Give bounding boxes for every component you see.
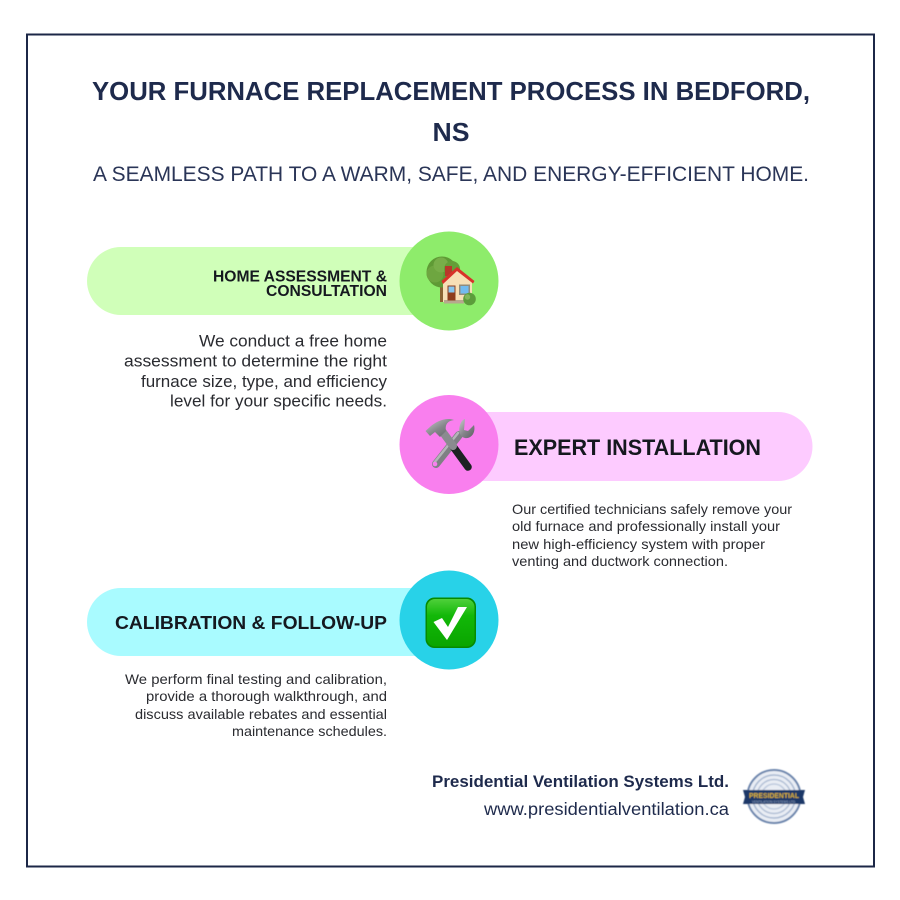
step 2 description: new high-efficiency system with proper (512, 537, 765, 552)
icon: house with tree (426, 256, 476, 305)
step 2 description: old furnace and professionally install your (512, 519, 780, 534)
step 3 heading: CALIBRATION & FOLLOW-UP (115, 613, 387, 633)
company logo badge: VENTILATION SYSTEMS LTD. (752, 800, 796, 804)
step 2 heading: EXPERT INSTALLATION (514, 435, 761, 460)
title: NS (432, 117, 470, 147)
icon: hammer and wrench (426, 419, 474, 467)
footer company name: Presidential Ventilation Systems Ltd. (432, 772, 729, 791)
step 3 description: provide a thorough walkthrough, and (146, 689, 387, 704)
step 2 description: Our certified technicians safely remove your (512, 502, 792, 517)
step 3 description: We perform final testing and calibration, (125, 672, 387, 687)
company logo badge (743, 770, 805, 823)
icon: green check mark (426, 598, 476, 648)
step 3: calibration and follow-up (87, 570, 498, 739)
step 3 banner (87, 588, 430, 656)
step 2 icon circle (400, 395, 498, 494)
subtitle: A SEAMLESS PATH TO A WARM, SAFE, AND ENERGY-EFFICIENT HOME. (93, 163, 809, 186)
step 2 description (512, 502, 792, 569)
step 1 heading (213, 268, 387, 300)
step 1 heading: HOME ASSESSMENT & (213, 268, 387, 286)
step 1 icon circle (400, 232, 498, 330)
step 1: home assessment (87, 232, 499, 410)
step 2 description: venting and ductwork connection. (512, 554, 728, 569)
step 1 banner (87, 247, 430, 315)
step 2: expert installation (400, 395, 813, 569)
step 3 description: discuss available rebates and essential (135, 707, 387, 722)
title: YOUR FURNACE REPLACEMENT PROCESS IN BEDFORD, (92, 76, 810, 106)
step 2 banner (470, 412, 813, 481)
step 1 description: level for your specific needs. (170, 392, 387, 410)
step 1 description (124, 332, 388, 410)
step 1 description: furnace size, type, and efficiency (141, 373, 388, 391)
title (92, 76, 810, 147)
step 3 description (125, 672, 387, 739)
step 3 icon circle (400, 570, 498, 670)
footer website: www.presidentialventilation.ca (483, 799, 729, 819)
step 1 description: We conduct a free home (199, 332, 387, 350)
step 1 description: assessment to determine the right (124, 352, 387, 370)
step 3 description: maintenance schedules. (232, 724, 387, 739)
step 1 heading: CONSULTATION (266, 283, 387, 300)
company logo badge: PRESIDENTIAL (749, 793, 800, 800)
